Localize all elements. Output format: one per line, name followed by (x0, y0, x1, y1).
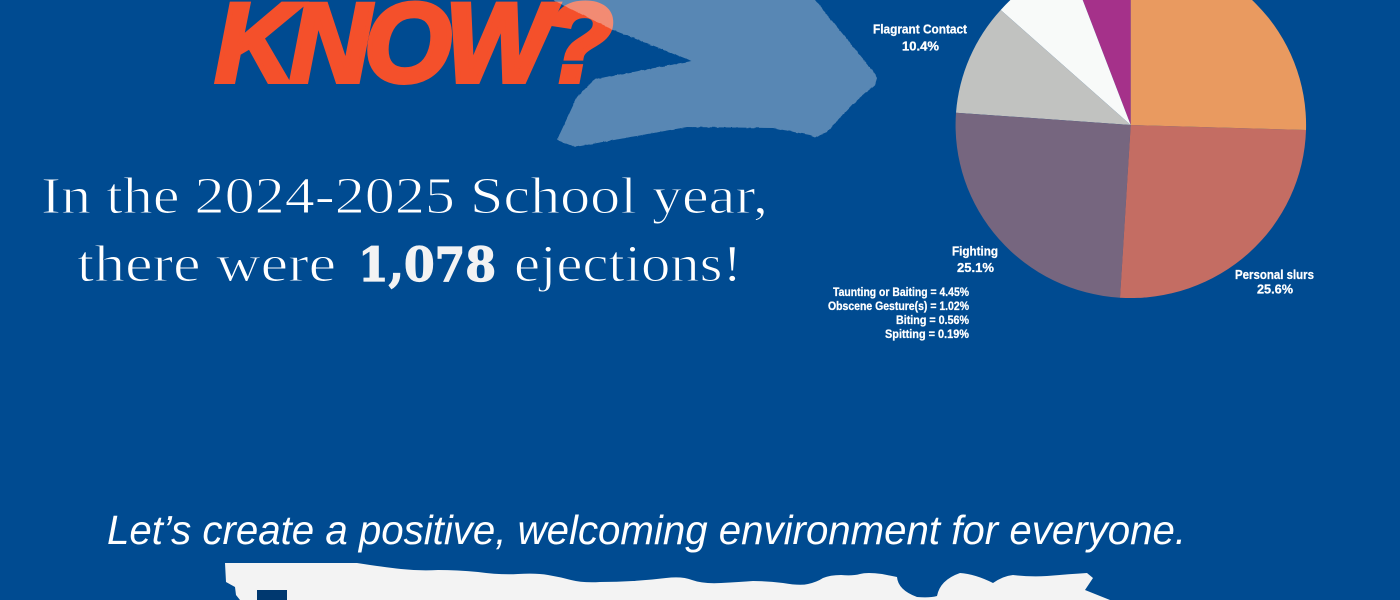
label: flagrant contact: Flagrant Contact (873, 22, 968, 36)
slice: fighting (956, 113, 1131, 298)
ejection count: 1,078 (358, 238, 496, 293)
line two: there were (77, 236, 336, 293)
minor categories list: Biting = 0.56% (896, 315, 969, 327)
minor categories list: Spitting = 0.19% (885, 329, 969, 341)
label: personal slurs: Personal slurs (1235, 268, 1314, 282)
label: flagrant contact: 10.4% (902, 40, 939, 54)
label: personal slurs (1235, 268, 1314, 296)
minor categories list (828, 287, 969, 341)
slice: personal slurs (1120, 125, 1306, 298)
slice: other (1069, 0, 1131, 125)
label: flagrant contact (873, 22, 968, 54)
tagline: Let’s create a positive, welcoming environment for everyone. (107, 507, 1186, 553)
label: personal slurs: 25.6% (1257, 282, 1293, 296)
label: fighting (952, 244, 998, 275)
line one: In the 2024-2025 School year, (41, 168, 768, 225)
line two (77, 236, 742, 293)
label: fighting: Fighting (952, 244, 998, 258)
statistic text (41, 168, 768, 293)
slice: white (1001, 0, 1131, 125)
pie chart: ejection reasons (956, 0, 1306, 298)
line two: ejections! (514, 236, 742, 293)
slice: flagrant contact (956, 10, 1131, 125)
label: fighting: 25.1% (957, 261, 994, 275)
torn paper panel (225, 563, 1110, 600)
minor categories list: Taunting or Baiting = 4.45% (833, 287, 969, 299)
arrow: brush stroke pointing to chart (513, 0, 877, 147)
dark blue block on paper (257, 590, 287, 600)
slice: orange (1131, 0, 1306, 130)
minor categories list: Obscene Gesture(s) = 1.02% (828, 301, 969, 313)
